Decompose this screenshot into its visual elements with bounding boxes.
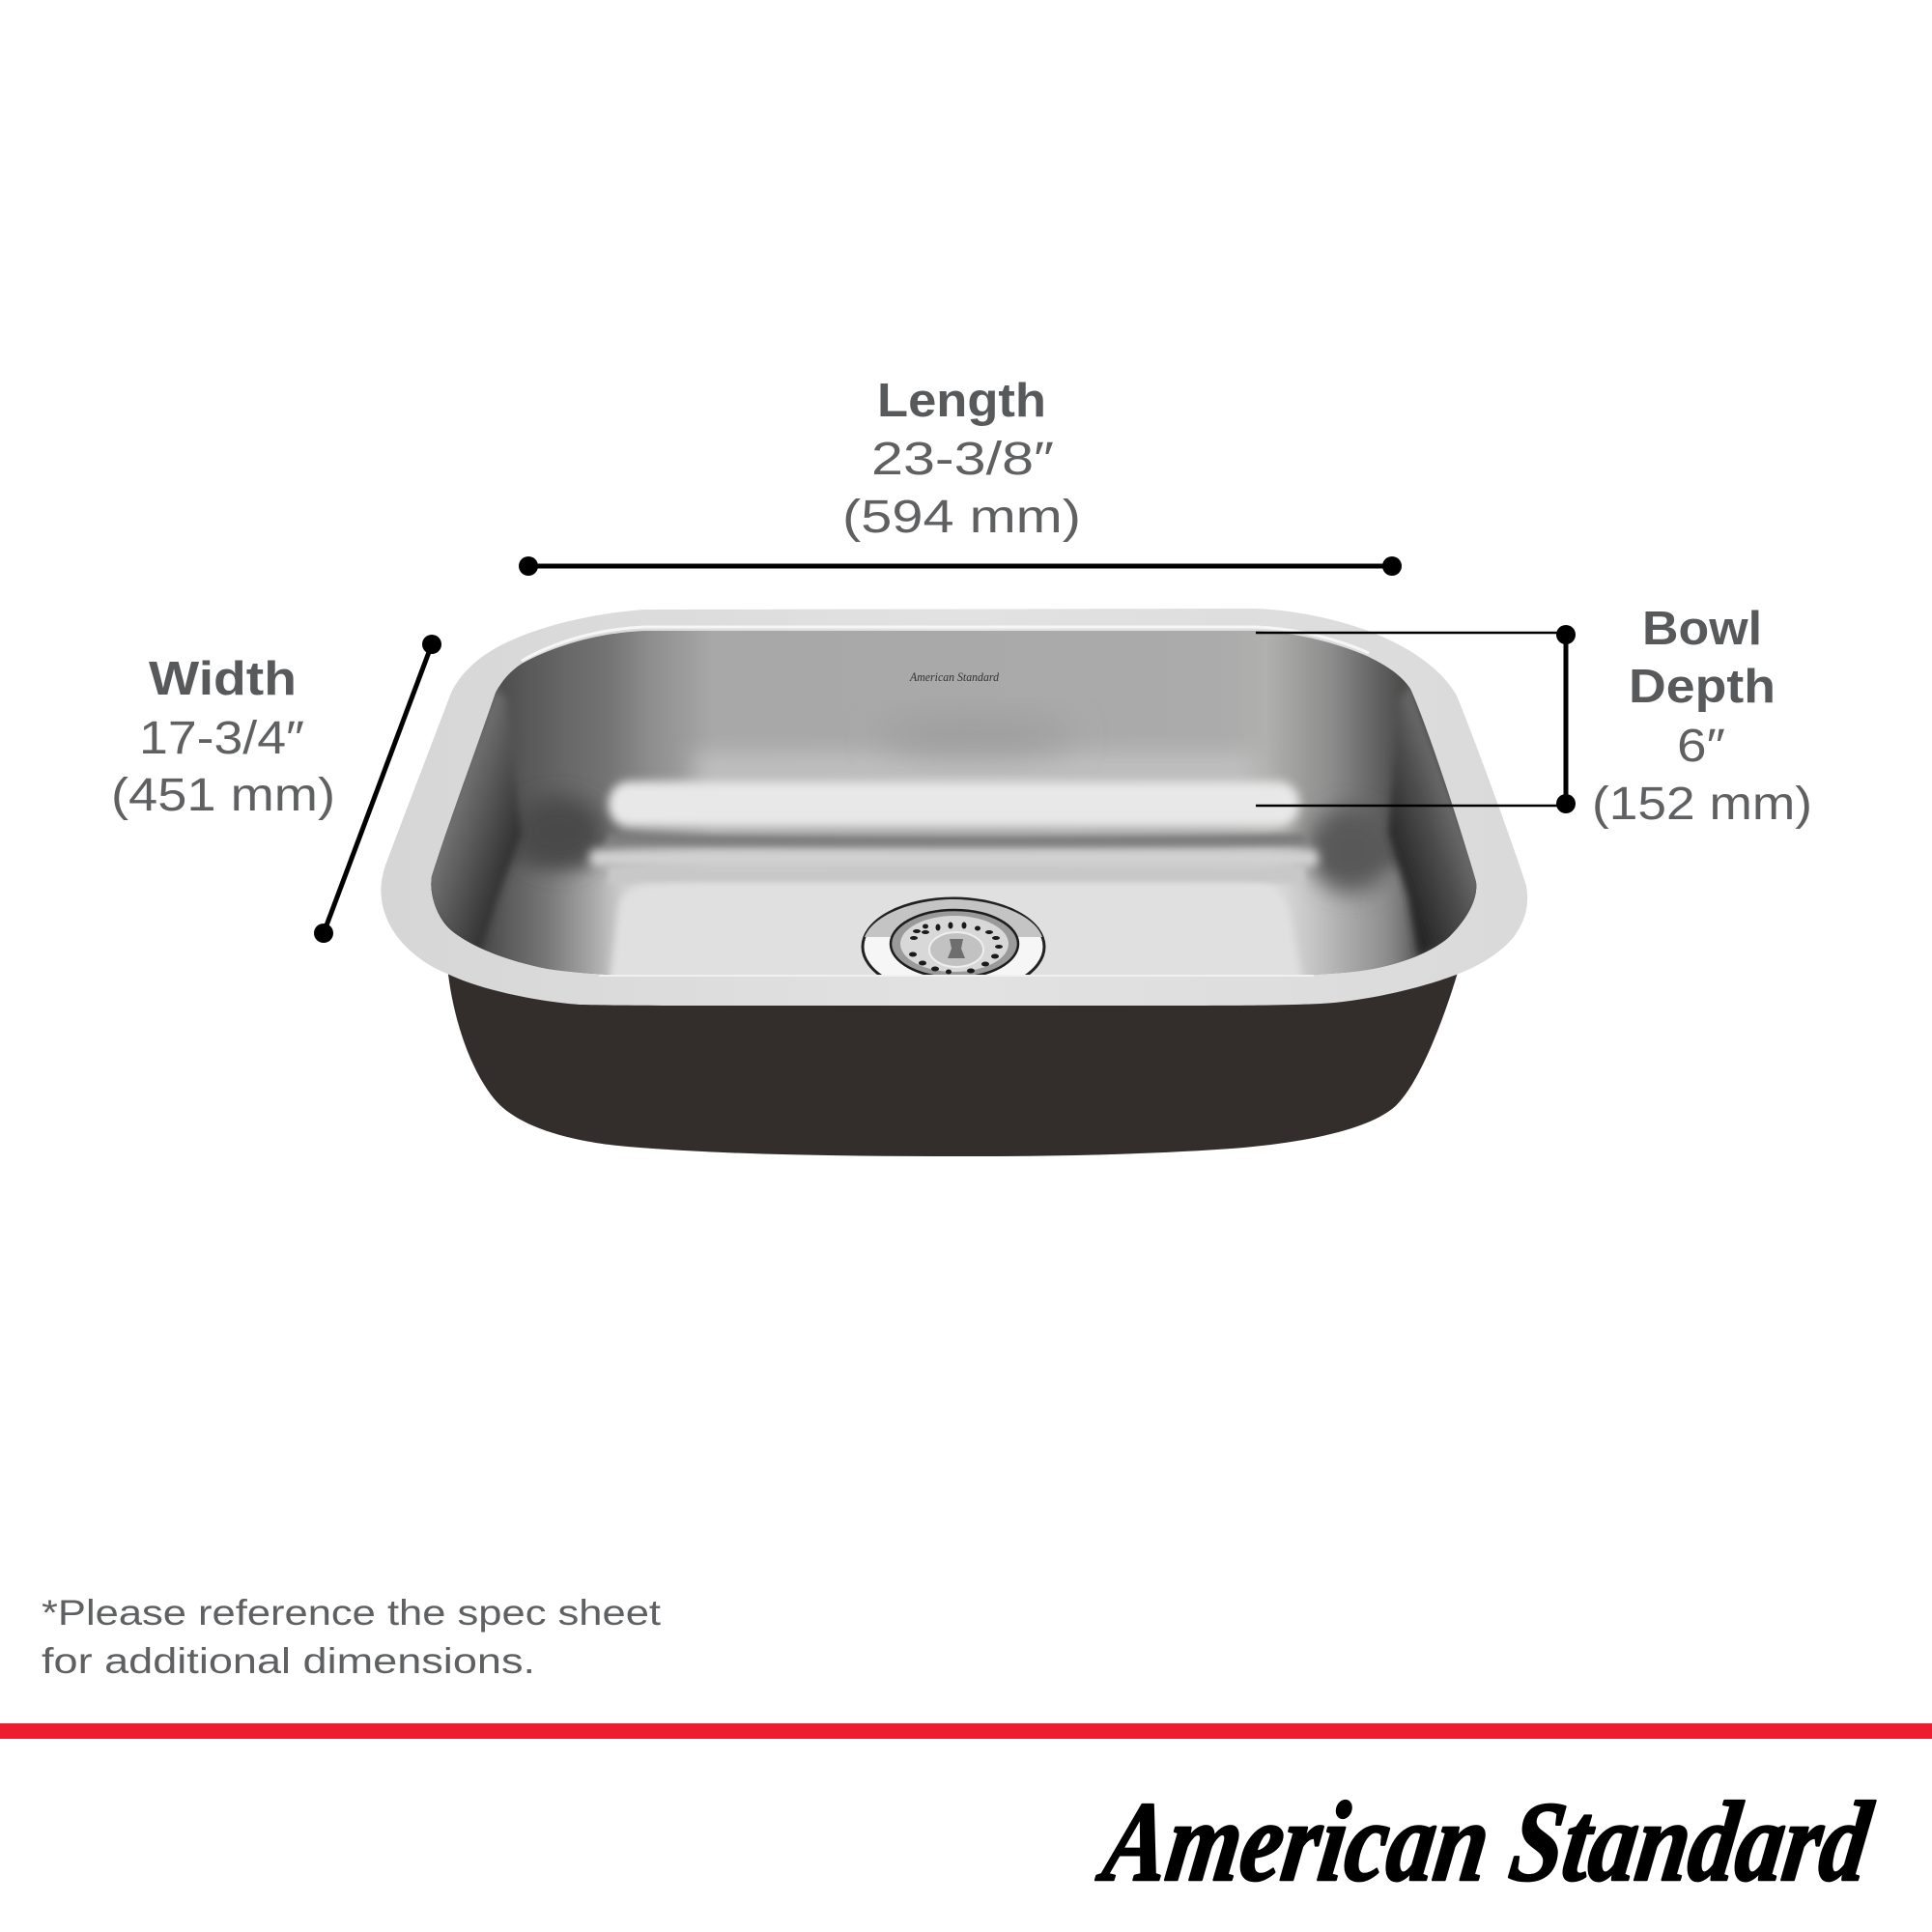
sink illustration [381, 609, 1527, 1156]
length millimetres: (594 mm) [842, 492, 1081, 543]
depth inches: 6″ [1677, 721, 1725, 772]
back wall lower glow [696, 753, 1256, 788]
floor [608, 887, 1302, 975]
depth measure bracket [1256, 625, 1576, 813]
red divider bar [0, 1723, 1932, 1739]
length label: Length [877, 375, 1046, 427]
dimension: bowl depth [1256, 603, 1812, 830]
floor base [431, 861, 1476, 975]
drain flange [862, 896, 1045, 975]
right dark blob [1308, 808, 1393, 893]
footnote [42, 1593, 662, 1681]
width inches: 17-3/4″ [139, 713, 304, 764]
light band [589, 849, 1319, 867]
flange reflection [865, 899, 1042, 937]
left side facet [425, 688, 522, 954]
rim inner highlight [522, 627, 1369, 661]
length measure line [519, 556, 1402, 576]
second band [609, 867, 1304, 884]
depth label: Depth [1629, 661, 1776, 713]
sink outer rim [381, 609, 1527, 1006]
ledge highlight [609, 781, 1299, 827]
footnote: for additional dimensions. [42, 1641, 535, 1681]
bowl label: Bowl [1642, 603, 1762, 655]
dimension: width [111, 635, 441, 943]
back wall centre shadow [908, 726, 1047, 764]
back wall [425, 623, 1483, 980]
strainer centre disk [929, 932, 983, 967]
strainer knob [948, 939, 965, 958]
right side facet [1388, 684, 1483, 956]
sink dark underside body [447, 966, 1460, 1156]
depth millimetres: (152 mm) [1592, 779, 1812, 830]
width label: Width [149, 653, 297, 705]
width measure line [314, 635, 441, 943]
length inches: 23-3/8″ [871, 434, 1054, 485]
small logo on back wall: American Standard [909, 669, 999, 684]
left dark blob [512, 796, 605, 869]
shadow band under ledge [604, 834, 1309, 850]
strainer [891, 910, 1018, 978]
sink bowl interior [431, 631, 1476, 975]
strainer slots [909, 922, 1003, 974]
rim bottom lip edge [599, 975, 1314, 977]
width millimetres: (451 mm) [111, 770, 335, 821]
footnote: *Please reference the spec sheet [42, 1593, 662, 1633]
dimension: length [519, 375, 1402, 576]
